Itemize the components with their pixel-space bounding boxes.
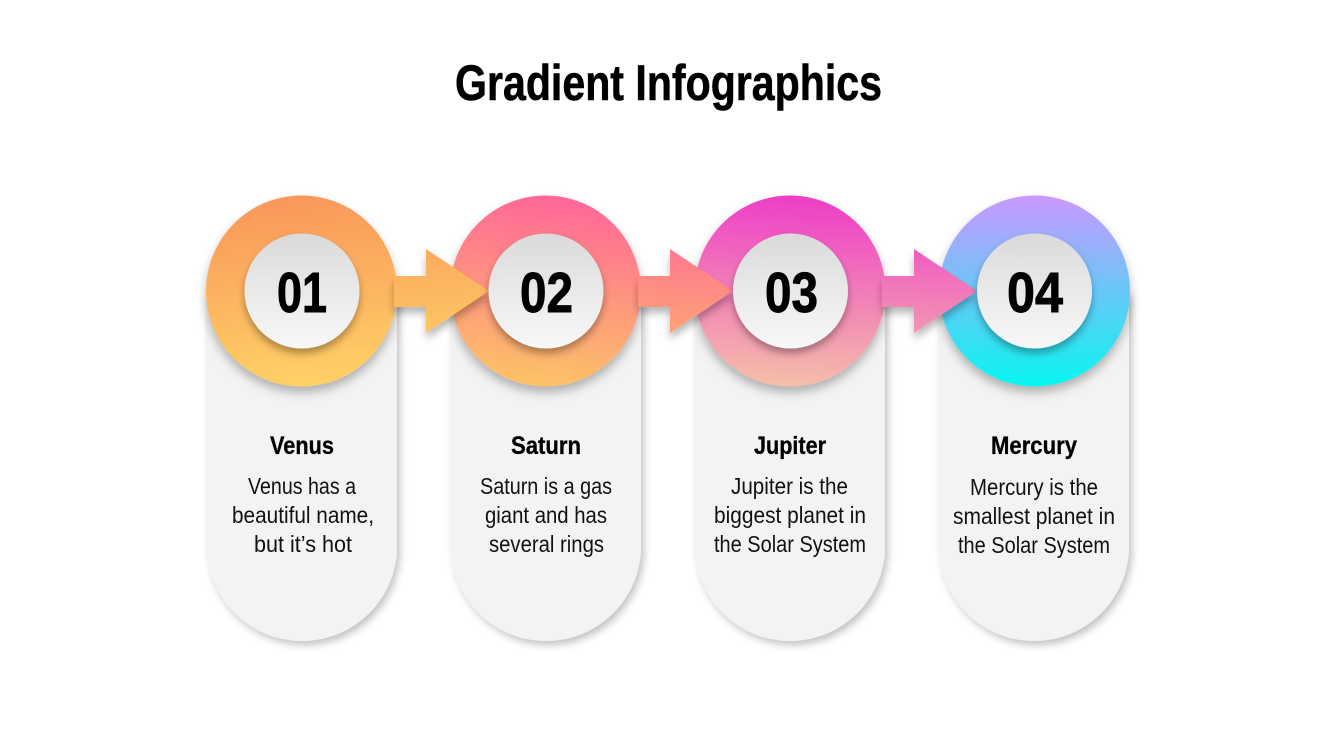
ring: step 4 — [939, 196, 1130, 386]
text: Mercury — [953, 432, 1115, 558]
text: Jupiter — [714, 432, 866, 557]
badge: 04: 04 — [1007, 261, 1063, 325]
badge: 01 — [244, 234, 360, 348]
text: Mercury: smallest planet in — [953, 503, 1115, 529]
badge: 01: 01 — [277, 261, 327, 325]
text: Jupiter: the Solar System — [714, 531, 866, 557]
text: Venus — [232, 432, 374, 557]
text: Mercury: the Solar System — [958, 532, 1110, 558]
ring: step 3 — [694, 196, 886, 386]
text: Jupiter: Jupiter is the — [731, 473, 848, 499]
text: Venus: beautiful name, — [232, 502, 374, 528]
text: Mercury: Mercury — [991, 432, 1077, 460]
arrow: step 3 to step 4 — [882, 249, 977, 333]
text: Jupiter: Jupiter — [754, 432, 826, 460]
badge: 02 — [488, 234, 604, 348]
title: Gradient Infographics — [455, 55, 882, 111]
panel: Mercury card — [939, 291, 1129, 641]
badge: 03: 03 — [765, 261, 818, 325]
panel: Saturn card — [451, 291, 641, 641]
text: Jupiter: biggest planet in — [714, 502, 866, 528]
text: Venus: but it’s hot — [254, 531, 353, 557]
text: Saturn: Saturn is a gas — [480, 473, 612, 499]
badge: 03 — [733, 234, 848, 348]
text: Saturn — [480, 432, 612, 557]
badge: 04 — [977, 234, 1092, 348]
panel: Venus card — [207, 291, 397, 641]
badge: 02: 02 — [520, 261, 573, 325]
text: Venus: Venus — [270, 432, 334, 460]
text: Saturn: Saturn — [511, 432, 581, 460]
panel: Jupiter card — [695, 291, 885, 641]
arrow: step 2 to step 3 — [638, 249, 733, 333]
text: Saturn: several rings — [489, 531, 604, 557]
text: Venus: Venus has a — [248, 473, 356, 499]
text: Saturn: giant and has — [485, 502, 607, 528]
ring: step 1 — [206, 196, 397, 386]
ring: step 2 — [450, 196, 641, 386]
text: Mercury: Mercury is the — [970, 474, 1098, 500]
arrow: step 1 to step 2 — [394, 249, 489, 333]
